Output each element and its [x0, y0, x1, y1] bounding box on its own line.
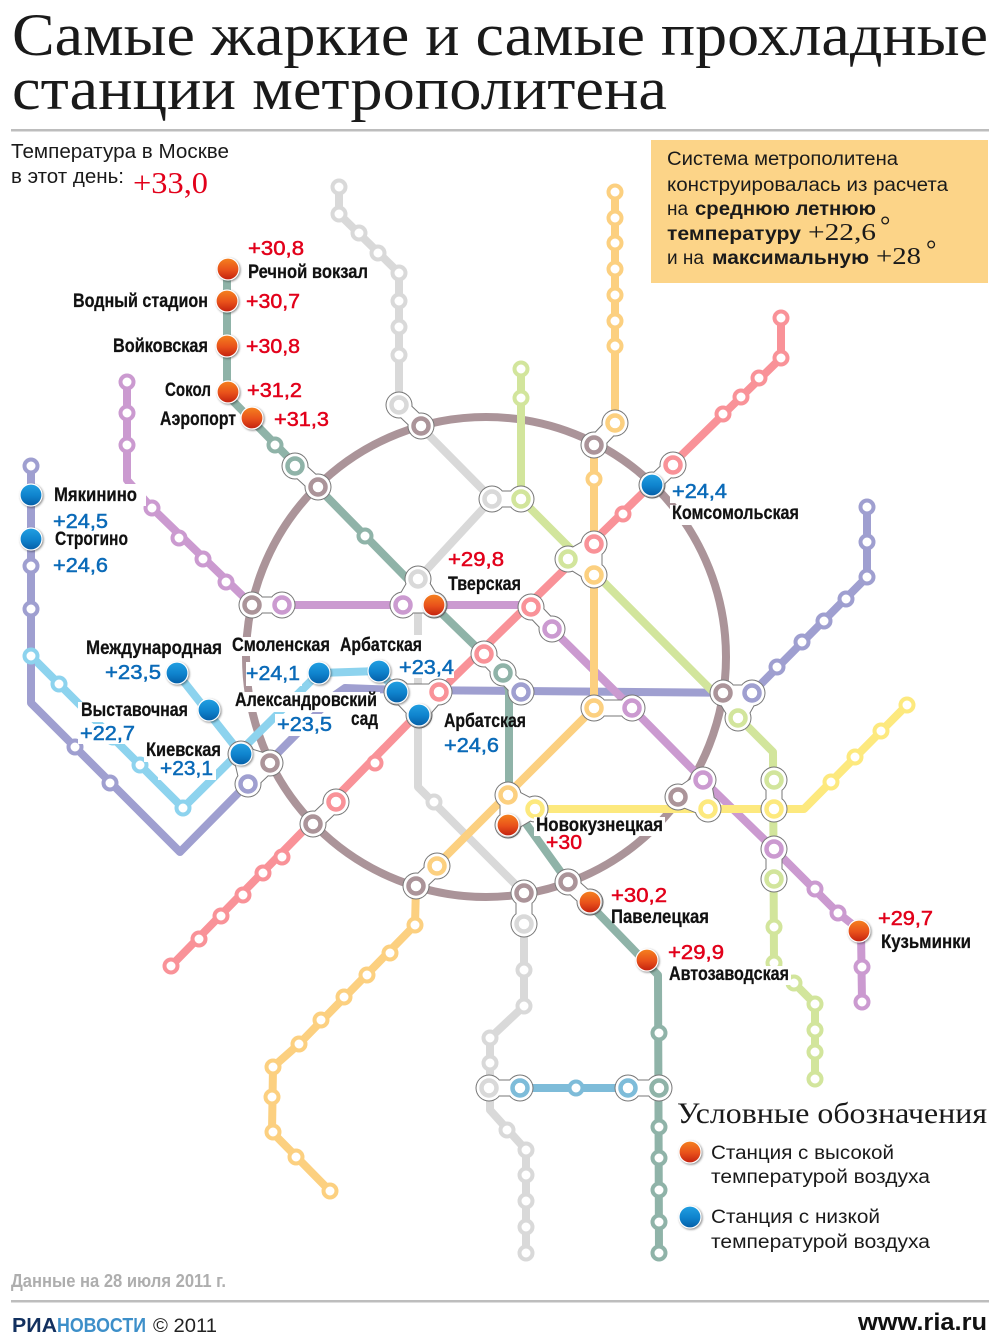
stations: pink	[164, 312, 788, 972]
station labels: hot: Тверская	[448, 574, 521, 595]
station labels: hot: Аэропорт	[160, 409, 236, 430]
station labels: cold: +22,7	[80, 723, 135, 745]
interchange: circle–purple west	[244, 598, 290, 612]
station labels: hot: Сокол	[165, 380, 211, 401]
interchange: pink–purple	[524, 600, 560, 636]
stations: purple	[120, 376, 868, 1008]
station labels: hot: +30,7	[246, 291, 300, 313]
interchange: circle–orange	[586, 416, 622, 452]
station labels: cold: +24,6	[53, 555, 108, 577]
station labels: hot: +29,7	[878, 908, 933, 930]
station labels: hot: Кузьминки	[881, 932, 971, 953]
stations: orange	[266, 186, 622, 1198]
station labels: hot: +31,2	[247, 380, 302, 402]
station labels: hot: +30,2	[611, 885, 667, 907]
temperature in Moscow	[11, 141, 229, 200]
interchange: Arbatskaya group	[397, 684, 446, 715]
station labels: hot: +31,3	[274, 409, 329, 431]
line: circle	[246, 417, 726, 897]
line: green	[227, 268, 659, 1253]
stations: yellow	[824, 698, 914, 788]
stations: violet	[24, 460, 874, 790]
station labels: hot: +29,9	[668, 942, 724, 964]
callout: design temperature: °	[926, 235, 936, 264]
stations: light blue	[24, 650, 190, 814]
line: light green	[521, 369, 815, 1079]
station labels: cold: Международная	[86, 638, 222, 659]
station labels: cold: Киевская	[146, 740, 221, 761]
legend	[677, 1097, 987, 1253]
footer logo: РИА	[12, 1315, 57, 1337]
interchange: orange–circle south	[408, 858, 444, 894]
station labels: hot: +29,8	[448, 549, 504, 571]
legend: cold station: Станция с низкой	[711, 1207, 880, 1228]
line: pink	[171, 318, 781, 966]
interchange: north-west grey–circle	[392, 398, 428, 434]
title	[12, 2, 988, 122]
interchange: light green–yellow	[766, 772, 782, 816]
line: Butovskaya	[520, 1084, 628, 1092]
interchange: east circle–violet–light green	[716, 686, 760, 726]
station labels: cold: +24,6	[444, 735, 499, 757]
callout: design temperature: и на	[667, 248, 704, 269]
line: light blue Filyovskaya	[31, 656, 397, 808]
station labels: cold: Строгино	[55, 529, 128, 550]
station labels: cold: +23,4	[399, 657, 454, 679]
callout: design temperature: среднюю летнюю	[695, 199, 876, 220]
callout: design temperature: максимальную	[712, 248, 869, 269]
hot station markers	[216, 258, 870, 971]
interchange: Tverskaya	[396, 572, 434, 612]
station labels: hot: Автозаводская	[669, 964, 789, 985]
stations: light green	[514, 362, 822, 1086]
station labels: cold: сад	[351, 709, 378, 730]
callout: design temperature: на	[667, 199, 688, 220]
interchange: circle–grey south	[516, 886, 532, 932]
interchange: green–circle	[288, 458, 326, 494]
station labels: hot: Войковская	[113, 336, 208, 357]
station labels: cold: Арбатская	[444, 711, 526, 732]
callout: design temperature: +22,6	[808, 220, 876, 246]
station labels: cold: +23,5	[277, 714, 332, 736]
interchange: grey–Butovskaya	[482, 1080, 528, 1096]
interchange: pink–green–violet	[476, 646, 528, 700]
station labels: hot: Водный стадион	[73, 291, 208, 312]
footer website: www.ria.ru	[857, 1309, 987, 1336]
label knockouts	[50, 482, 802, 985]
stations: grey	[332, 180, 532, 1260]
interchange: purple–light green	[766, 842, 782, 886]
station labels: cold: Арбатская	[340, 635, 422, 656]
cold station markers	[20, 474, 663, 765]
line: grey	[339, 187, 526, 1253]
footer logo: НОВОСТИ	[57, 1315, 146, 1337]
title: Самые жаркие и самые прохладные	[12, 2, 988, 68]
interchange: Paveletskaya	[560, 874, 590, 902]
callout: design temperature: конструировалась из расчета	[667, 175, 948, 196]
station labels: cold: +24,1	[246, 663, 300, 685]
line: yellow	[535, 705, 907, 809]
title: станции метрополитена	[12, 56, 667, 122]
legend: hot station	[679, 1141, 930, 1188]
station labels: cold: +24,4	[672, 481, 727, 503]
legend: Условные обозначения	[677, 1097, 987, 1130]
interchange: Komsomolskaya	[652, 458, 680, 485]
interchange: pink–light green–orange	[560, 536, 602, 582]
station labels: cold: Александровский	[235, 690, 377, 711]
station labels: hot	[73, 238, 971, 985]
interchange: Butovskaya–green	[620, 1080, 666, 1096]
line: light blue branch	[177, 673, 241, 754]
station labels: cold: +23,5	[105, 662, 161, 684]
station labels: cold: +23,1	[160, 758, 213, 780]
legend: hot station: температурой воздуха	[711, 1167, 930, 1188]
interchange: grey–light green	[484, 492, 528, 506]
footer logo	[12, 1315, 217, 1337]
temperature in Moscow: +33,0	[133, 165, 208, 200]
line: violet	[31, 466, 867, 852]
station labels: hot: Павелецкая	[611, 907, 709, 928]
callout: design temperature	[651, 140, 988, 283]
data date note: Данные на 28 июля 2011 г.	[11, 1271, 226, 1291]
station labels: cold	[53, 481, 799, 780]
station labels: hot: Речной вокзал	[248, 262, 368, 283]
legend: cold station: температурой воздуха	[711, 1232, 930, 1253]
station labels: cold: Комсомольская	[672, 503, 799, 524]
interchange: pink–circle	[306, 794, 344, 832]
station labels: cold: +24,5	[53, 511, 108, 533]
station labels: hot: +30,8	[246, 336, 300, 358]
station labels: hot: Новокузнецкая	[536, 815, 663, 836]
interchange: orange–purple	[586, 700, 640, 716]
callout: design temperature: °	[880, 211, 890, 240]
line: purple	[127, 382, 862, 1002]
callout: design temperature: Система метрополитена	[667, 149, 898, 170]
interchange: purple–circle–yellow	[670, 772, 716, 816]
station labels: hot: +30	[546, 832, 582, 854]
line: orange	[272, 192, 615, 1191]
callout: design temperature: температуру	[667, 224, 801, 245]
station labels: hot: +30,8	[248, 238, 304, 260]
interchange: Kiyevskaya	[240, 754, 278, 792]
temperature in Moscow: Температура в Москве	[11, 141, 229, 163]
legend: cold station	[679, 1206, 930, 1253]
legend: hot station: Станция с высокой	[711, 1143, 894, 1164]
station labels: cold: Выставочная	[81, 700, 188, 721]
station labels: cold: Мякинино	[54, 485, 137, 506]
callout: design temperature: +28	[876, 244, 921, 270]
station labels: cold: Смоленская	[232, 635, 330, 656]
stations: green	[268, 438, 666, 1260]
stations: Butovskaya	[570, 1082, 582, 1094]
footer logo: © 2011	[153, 1316, 217, 1337]
metro map	[24, 180, 914, 1260]
temperature in Moscow: в этот день:	[11, 166, 124, 188]
interchange: Novokuznetskaya	[500, 788, 542, 825]
